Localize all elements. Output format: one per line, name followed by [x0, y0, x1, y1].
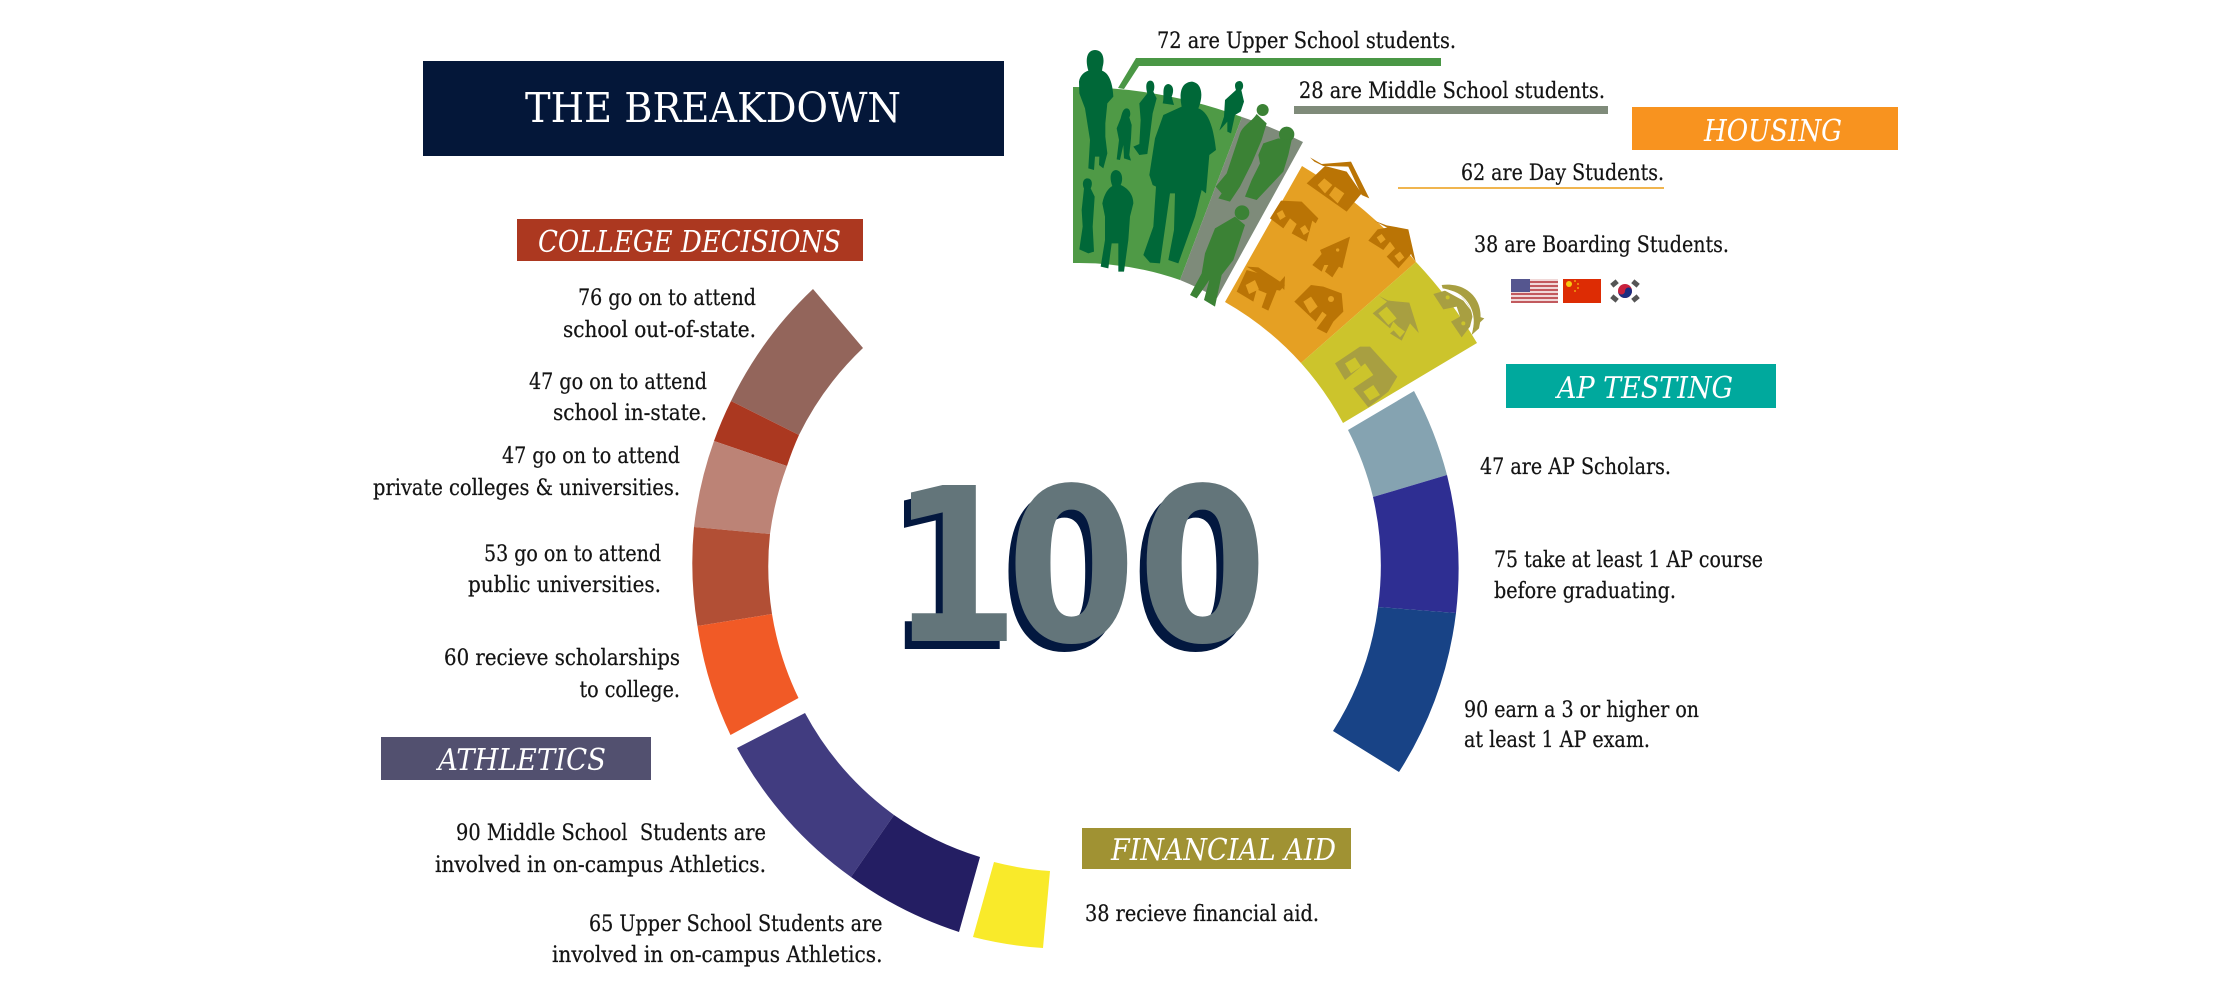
text: scholarships [444, 646, 680, 703]
text: upper school athletics [552, 912, 882, 968]
icon: flag USA [1511, 279, 1558, 303]
text: middle school: 28 are Middle School students. [1299, 79, 1605, 104]
panel: college decisions [373, 219, 863, 735]
ring segment: scholarships [698, 614, 798, 735]
panel: housing [1225, 107, 1898, 423]
text: scholarships: 60 recieve scholarships [444, 646, 680, 671]
text: AP course: 75 take at least 1 AP course [1494, 548, 1763, 573]
text: middle school athletics: involved in on-campus Athletics. [435, 853, 766, 878]
text: AP course: before graduating. [1494, 579, 1676, 604]
text: upper school athletics: 65 Upper School Students are [589, 912, 882, 937]
icon: flag China [1563, 279, 1601, 303]
panel: AP testing [1333, 364, 1776, 772]
text: AP scholars: 47 are AP Scholars. [1480, 455, 1671, 480]
leader line: upper school [1118, 58, 1441, 89]
leader line: day students [1398, 187, 1664, 189]
heading: housing: HOUSING [1703, 114, 1842, 149]
ring segment: public universities [692, 527, 772, 626]
text: private colleges [373, 444, 680, 501]
panel: athletics [381, 713, 980, 968]
segment: boarding students [1301, 262, 1477, 423]
heading: housing [1632, 107, 1898, 150]
ring segment: AP exam [1333, 607, 1456, 772]
title [423, 61, 1004, 156]
ring segment: upper school athletics [851, 815, 980, 932]
text: private colleges: 47 go on to attend [502, 444, 680, 469]
text: in-state: 47 go on to attend [529, 370, 707, 395]
text: public universities [468, 542, 661, 598]
heading: financial aid: FINANCIAL AID [1110, 833, 1336, 868]
panel: financial aid [973, 828, 1351, 948]
text: public universities: public universities. [468, 573, 661, 598]
text: upper school athletics: involved in on-campus Athletics. [552, 943, 882, 968]
ring segment: AP course [1373, 475, 1459, 613]
text: boarding students: 38 are Boarding Students. [1474, 233, 1729, 258]
text: financial aid: 38 recieve financial aid. [1085, 902, 1319, 927]
text: in-state [529, 370, 707, 426]
ring segment: financial aid [973, 862, 1050, 948]
icon: upper school silhouettes [1079, 50, 1244, 272]
text: AP exam: at least 1 AP exam. [1464, 728, 1650, 753]
text: public universities: 53 go on to attend [484, 542, 661, 567]
segment: upper school [1073, 87, 1242, 280]
text: scholarships: to college. [580, 678, 680, 703]
text: AP course [1494, 548, 1763, 604]
text: day students: 62 are Day Students. [1461, 161, 1664, 186]
panel: students [1073, 29, 1608, 307]
heading: college decisions: COLLEGE DECISIONS [538, 225, 841, 260]
text: middle school athletics: 90 Middle School Students are [456, 821, 766, 846]
ring segment: private colleges [694, 441, 787, 534]
leader line: middle school [1294, 106, 1608, 114]
text: AP exam [1464, 698, 1699, 753]
ring segment: AP scholars [1348, 391, 1447, 497]
ring segment: middle school athletics [737, 713, 894, 877]
text: private colleges: private colleges & universities. [373, 476, 680, 501]
segment: middle school [1180, 117, 1303, 298]
ring segment: out-of-state [731, 289, 863, 435]
text: AP exam: 90 earn a 3 or higher on [1464, 698, 1699, 723]
text: out-of-state: school out-of-state. [563, 318, 756, 343]
title: THE BREAKDOWN [525, 84, 901, 132]
icon: middle school silhouettes [1190, 104, 1294, 307]
text: out-of-state: 76 go on to attend [578, 286, 756, 311]
heading: athletics: ATHLETICS [435, 743, 606, 778]
center number 100: 100 [890, 444, 1267, 692]
text: middle school athletics [435, 821, 766, 878]
heading: AP testing: AP TESTING [1554, 371, 1733, 406]
heading: athletics [381, 737, 651, 780]
icon: boarding student houses [1335, 285, 1484, 407]
segment: day students [1225, 166, 1416, 363]
ring segment: in-state [714, 401, 799, 466]
icon: flag South Korea [1610, 279, 1640, 303]
text: out-of-state [563, 286, 756, 343]
icon: day student houses [1237, 157, 1416, 333]
text: in-state: school in-state. [553, 401, 707, 426]
center number 100: 100 [883, 452, 1260, 700]
heading: AP testing [1506, 364, 1776, 408]
text: upper school: 72 are Upper School students. [1157, 29, 1456, 54]
